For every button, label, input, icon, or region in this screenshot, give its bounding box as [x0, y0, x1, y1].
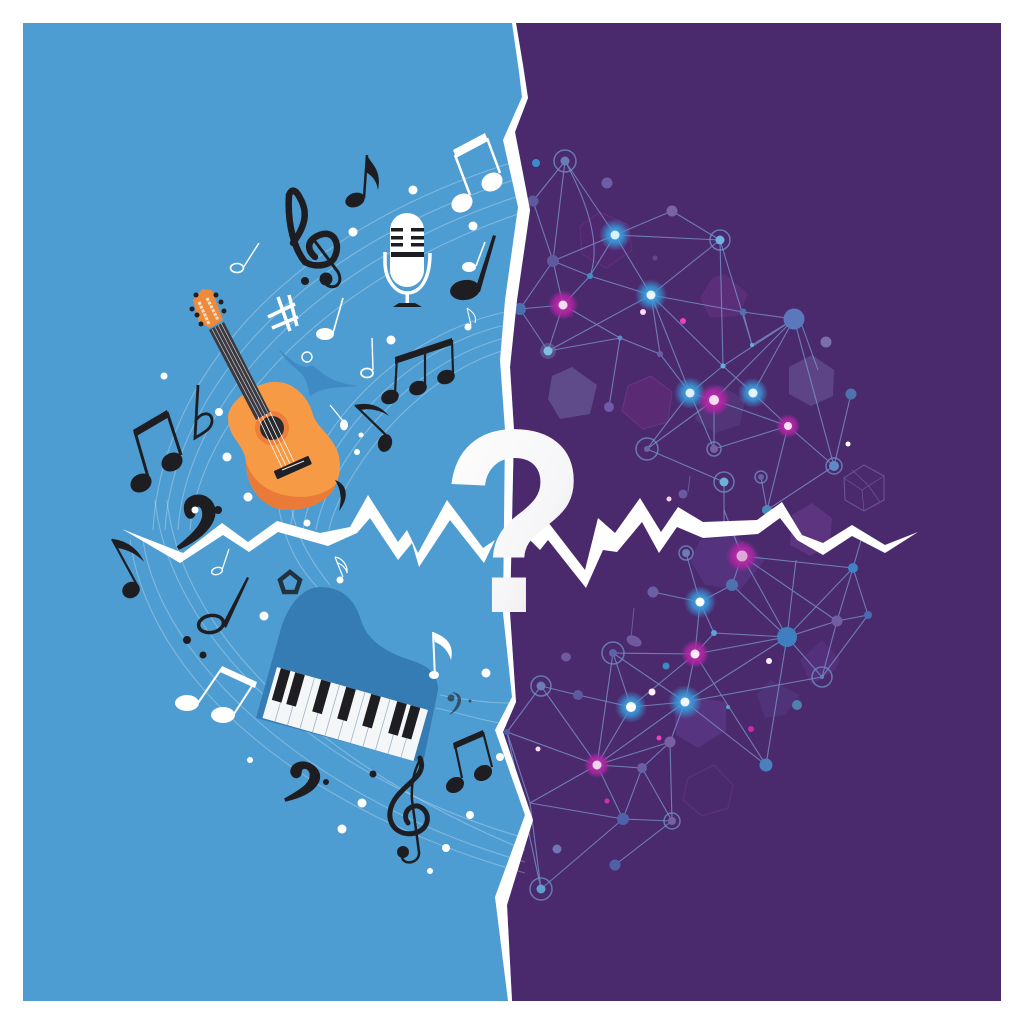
central question mark: ? — [440, 376, 588, 668]
icon: grand piano — [256, 587, 438, 763]
white outline note — [230, 243, 259, 272]
beamed pair lower right — [443, 730, 495, 796]
icon: black eighth notes and beamed notes, upper left — [127, 155, 496, 511]
sixteenth note top — [343, 155, 379, 210]
beamed white pair — [175, 666, 257, 723]
network: translucent hexagons — [548, 212, 884, 816]
icon: blue swoosh shape — [278, 348, 358, 396]
dark pentagon ring — [280, 572, 300, 592]
network: plain nodes — [504, 156, 872, 894]
icon: white notes lower — [175, 549, 452, 723]
white angled note — [330, 405, 348, 430]
small flagged note — [335, 557, 347, 584]
large black note with white small note — [449, 235, 496, 302]
music: staff line arcs — [130, 160, 525, 873]
panel: music (blue) — [23, 23, 543, 1001]
network: glowing blue nodes — [599, 219, 768, 723]
network: glowing magenta nodes — [548, 290, 800, 778]
big outline note — [197, 577, 249, 635]
icon: treble clef lower — [390, 758, 427, 862]
sixteenth left — [112, 539, 144, 601]
network: ring nodes — [530, 150, 842, 900]
note stub dot — [301, 277, 309, 285]
icon: black notes and clefs, lower — [112, 539, 495, 800]
beamed pair left — [127, 410, 186, 496]
tiny white flag note — [464, 308, 476, 330]
white dots, lower scatter — [247, 612, 504, 874]
icon: white notes upper — [230, 133, 506, 430]
white quarter note — [316, 298, 343, 340]
blurred bass clef — [448, 692, 472, 715]
icon: guitar — [190, 289, 340, 510]
icon: microphone — [385, 213, 430, 307]
rotated eighth note — [355, 404, 394, 454]
small outline note — [211, 549, 229, 576]
divider: jagged white split — [495, 23, 533, 1001]
white small note beside black note — [462, 242, 485, 272]
icon: bass clef upper — [178, 496, 222, 548]
sharp sign — [268, 295, 298, 331]
panel: network (purple) — [503, 23, 1001, 1001]
clipped flag near guitar — [335, 480, 346, 511]
network: connecting lines — [507, 161, 868, 889]
white outline note centre — [361, 338, 373, 378]
bass clef lower — [285, 763, 329, 800]
triple beamed notes — [379, 338, 457, 407]
icon: treble clef upper — [289, 191, 340, 287]
crack: horizontal white zigzag, left side — [122, 495, 495, 567]
network: small bright sparks — [536, 309, 850, 804]
white dots, upper scatter — [160, 186, 478, 526]
crack: horizontal white zigzag, right side — [530, 498, 918, 588]
white flag note by piano — [429, 632, 452, 679]
flat sign — [195, 385, 212, 438]
beamed white pair — [448, 133, 506, 216]
